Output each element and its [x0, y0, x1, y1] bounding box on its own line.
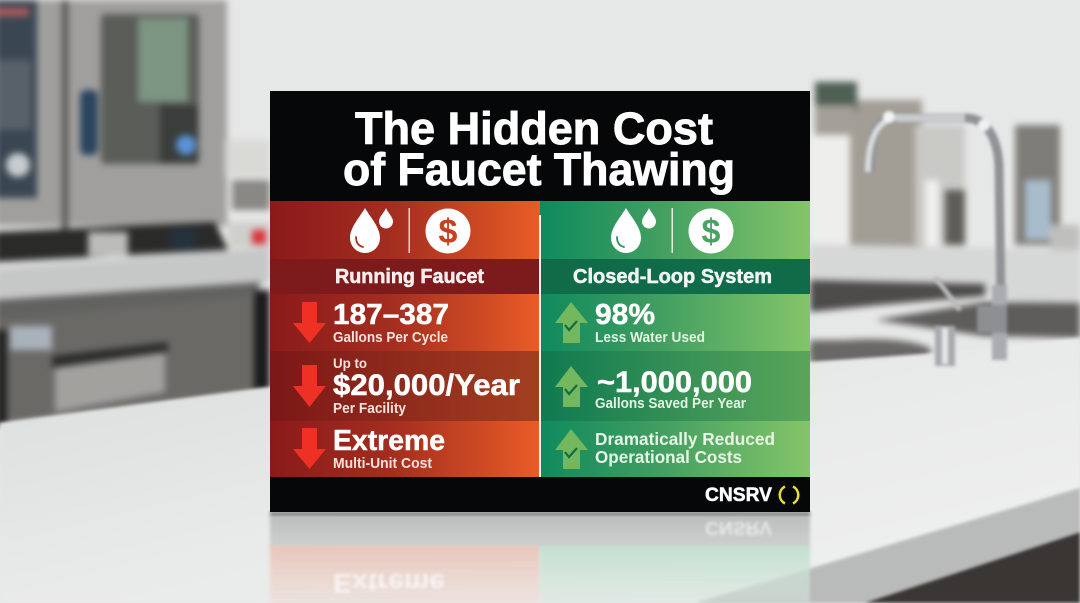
panel: running faucet [270, 201, 540, 477]
header: closed-loop system [541, 259, 810, 294]
row: less water used: Less Water Used [595, 329, 705, 346]
logo: CNSRV: CNSRV [705, 485, 772, 506]
row: gallons saved [541, 351, 810, 421]
reflection of the sign on the counter: CNSRV [705, 518, 772, 538]
icon: dollar coin: $ [702, 213, 721, 251]
row: gallons per cycle: 187–387 [333, 299, 449, 331]
row: less water used: 98% [595, 299, 655, 331]
row: cost per facility: Per Facility [333, 400, 407, 417]
reflection of the sign on the counter [270, 512, 810, 603]
sign shadow [270, 511, 810, 516]
icon: dollar coin [426, 208, 470, 254]
row: gallons saved: Gallons Saved Per Year [595, 395, 746, 412]
title [343, 103, 735, 195]
row: gallons saved: ~1,000,000 [597, 366, 752, 399]
icon: water drops [350, 208, 393, 253]
counter top [0, 338, 1080, 603]
row: multi-unit cost: Multi-Unit Cost [333, 455, 432, 472]
header: running faucet: Running Faucet [335, 266, 484, 288]
row: multi-unit cost: Extreme [333, 425, 445, 457]
icon: dollar coin [688, 208, 734, 254]
row: reduced costs [541, 421, 810, 477]
row: reduced costs: Operational Costs [595, 447, 742, 467]
row: gallons per cycle: Gallons Per Cycle [333, 329, 448, 346]
header: closed-loop system: Closed-Loop System [573, 266, 772, 288]
row: gallons per cycle [270, 294, 539, 351]
panel: closed-loop system [540, 201, 810, 477]
panel: title bar [270, 91, 810, 202]
row: cost per facility: Up to [333, 355, 367, 371]
title: The Hidden Cost [355, 103, 713, 154]
dark under counter [864, 532, 1080, 603]
faucet [868, 111, 1007, 366]
row: reduced costs: Dramatically Reduced [595, 429, 775, 449]
sign [270, 91, 810, 512]
row: cost per facility: $20,000/Year [333, 369, 520, 402]
counter side edge [695, 488, 1080, 603]
icon: dollar coin: $ [439, 213, 458, 251]
panel: footer [270, 477, 810, 512]
header: running faucet [270, 259, 539, 294]
title: of Faucet Thawing [343, 144, 735, 195]
row: cost per facility [270, 351, 539, 421]
icon: water drops [611, 208, 656, 253]
divider [539, 215, 541, 477]
row: less water used [541, 294, 810, 351]
reflection of the sign on the counter: Extreme [333, 568, 445, 598]
row: multi-unit cost [270, 421, 539, 477]
